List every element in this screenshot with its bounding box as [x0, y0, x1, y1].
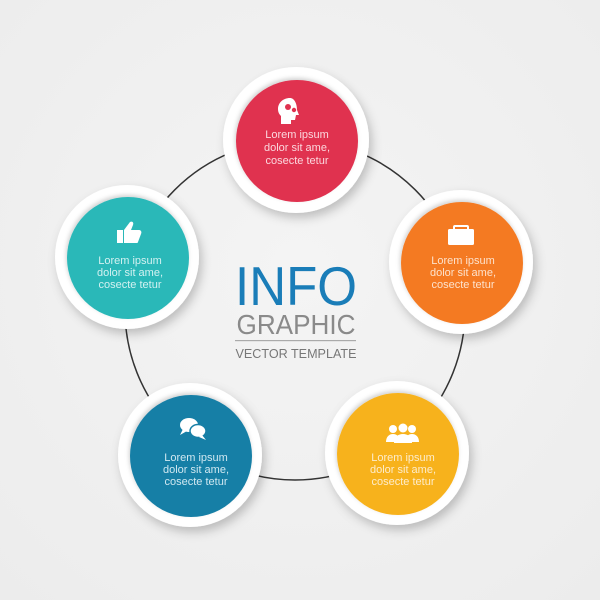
circle: bottom-right yellow: dolor sit ame, — [370, 464, 436, 476]
title block: VECTOR TEMPLATE — [236, 347, 356, 361]
circle: bottom-left blue: cosecte tetur — [165, 476, 228, 488]
circle: top red: cosecte tetur — [266, 155, 329, 167]
circle: right orange — [389, 190, 533, 334]
title block: GRAPHIC — [236, 309, 356, 340]
circle: top red: Lorem ipsum — [265, 129, 329, 141]
icon: thumbs up — [117, 222, 141, 243]
icon: head with gears — [278, 98, 299, 124]
circle: bottom-left blue: Lorem ipsum — [164, 452, 228, 464]
circle: top red: dolor sit ame, — [264, 142, 330, 154]
title block — [235, 255, 357, 361]
circle: left teal: cosecte tetur — [99, 279, 162, 291]
icon: speech bubbles — [180, 418, 206, 440]
circle: right orange: cosecte tetur — [432, 279, 495, 291]
circle: bottom-left blue: dolor sit ame, — [163, 464, 229, 476]
circle: bottom-right yellow — [325, 381, 469, 525]
connecting ring — [125, 140, 465, 480]
circle: right orange: dolor sit ame, — [430, 267, 496, 279]
title block: INFO — [235, 255, 357, 317]
icon: group of people — [386, 424, 419, 443]
icon: briefcase — [448, 226, 474, 245]
circle: left teal: dolor sit ame, — [97, 267, 163, 279]
circle: right orange: Lorem ipsum — [431, 255, 495, 267]
circle: bottom-right yellow: cosecte tetur — [372, 476, 435, 488]
circle: left teal: Lorem ipsum — [98, 255, 162, 267]
circle: top red — [223, 67, 369, 213]
circle: left teal — [55, 185, 199, 329]
circle: bottom-left blue — [118, 383, 262, 527]
circle: bottom-right yellow: Lorem ipsum — [371, 452, 435, 464]
